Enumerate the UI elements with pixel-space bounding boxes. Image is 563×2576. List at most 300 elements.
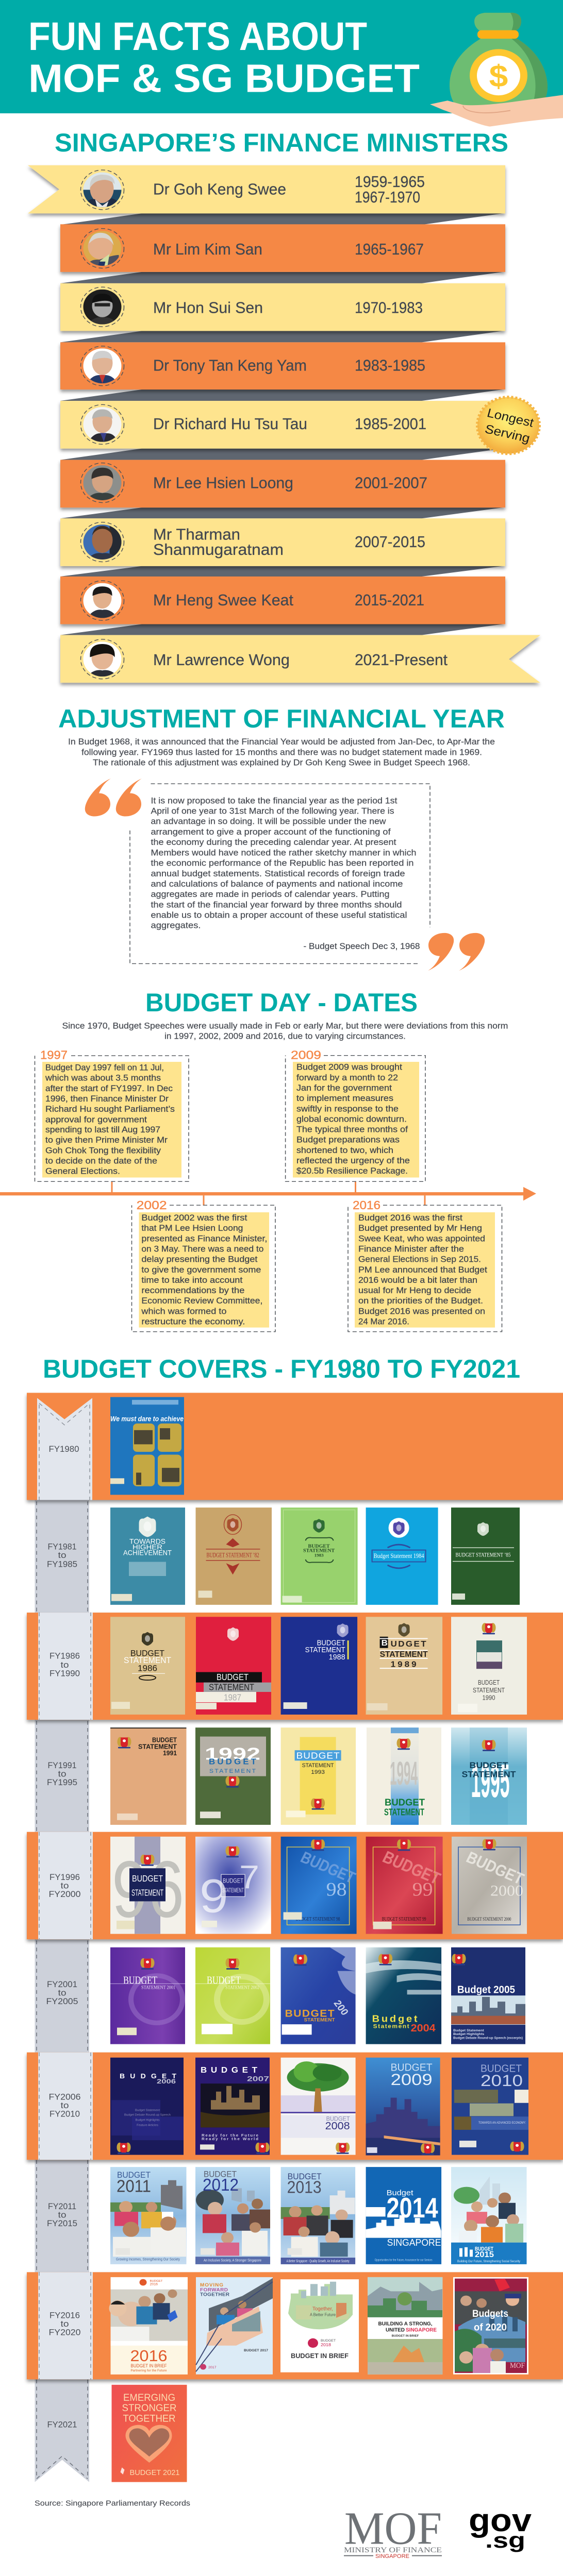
label: FY2016 to FY2020: FY2016	[49, 2310, 80, 2320]
timeline card: 2009	[286, 1048, 425, 1181]
cover: FY1987: BUDGET	[217, 1672, 249, 1682]
label: FY2016 to FY2020: to	[60, 2319, 69, 2329]
timeline card: 2016: Swee Keat, who was appointed	[358, 1233, 485, 1243]
timeline card: 2016: 2016	[353, 1199, 380, 1212]
cover: FY1996: BUDGET	[132, 1874, 163, 1884]
badge: longest serving: Serving	[483, 422, 532, 446]
timeline card: 2016: Budget 2016 was presented on	[358, 1306, 485, 1316]
cover: FY1997: 7	[239, 1859, 259, 1896]
label: FY2001 to FY2005	[46, 1979, 78, 2006]
quote text: April of one year to 31st March of the following year. There is	[151, 806, 394, 816]
cover: FY1992: 1992	[205, 1745, 260, 1764]
timeline card: 2009: 2009	[291, 1048, 321, 1062]
label: FY1991 to FY1995: FY1991	[47, 1760, 77, 1770]
cover: FY2007: BUDGET	[201, 2066, 257, 2075]
cover: FY2011: 2011	[117, 2177, 151, 2196]
label: FY2006 to FY2010: FY2006	[48, 2092, 80, 2102]
cover: FY2016: Partnering for the Future	[131, 2369, 167, 2372]
cover: FY2003	[281, 1947, 356, 2044]
timeline card: 2009: shortened to two, which	[296, 1145, 393, 1155]
minister: Mr Heng Swee Keat: 2015-2021	[355, 591, 424, 609]
minister: Mr Lawrence Wong: Mr Lawrence Wong	[153, 651, 290, 669]
cover: FY2004: Statement	[373, 2024, 409, 2029]
ribbon folds	[60, 213, 503, 635]
badge: longest serving: Longest	[486, 406, 535, 430]
cover: FY2002: BUDGET	[207, 1974, 241, 1986]
cover: FY2017: 2017	[208, 2366, 217, 2369]
icon: closing quote mark	[428, 933, 485, 971]
timeline card: 2002	[132, 1199, 275, 1332]
cover: FY2010: 2010	[481, 2071, 523, 2089]
cover: FY1991	[110, 1727, 187, 1825]
label: FY1981 to FY1985: to	[58, 1550, 66, 1560]
timeline card: 2009: swiftly in response to the	[296, 1104, 399, 1113]
cover: FY1990: STATEMENT	[473, 1686, 505, 1694]
cover: FY2012: An Inclusive Society, A Stronger Singapore	[204, 2258, 261, 2262]
logo: MOF: SINGAPORE	[375, 2554, 409, 2560]
cover: FY1991: STATEMENT	[138, 1743, 177, 1750]
cover: FY2000: 2000	[490, 1883, 523, 1899]
cover: FY2004: 2004	[411, 2023, 436, 2034]
cover: FY2012	[195, 2167, 270, 2264]
covers ribbon: grey bookmark	[35, 1497, 89, 2482]
label: FY2001 to FY2005: to	[58, 1988, 66, 1998]
cover: FY2017: BUDGET 2017	[244, 2349, 268, 2352]
cover: FY2016: 2016	[130, 2347, 167, 2365]
cover: FY2001: BUDGET	[123, 1974, 157, 1986]
cover: FY2015	[451, 2167, 527, 2264]
arrow: timeline axis	[0, 1187, 536, 1200]
cover: FY2007	[195, 2058, 270, 2155]
cover: FY2015: 2015	[475, 2250, 494, 2259]
cover: FY2014: Opportunities for the Future, Assurance for our Seniors	[375, 2259, 433, 2262]
cover: FY2007: Ready for the World	[202, 2137, 258, 2141]
cover: FY2016: 2016	[150, 2283, 158, 2286]
logo: MOF: MOF	[344, 2503, 442, 2554]
label: FY2006 to FY2010: to	[60, 2100, 69, 2110]
logo: gov.sg: .sg	[485, 2529, 525, 2553]
label: FY2011 to FY2015	[47, 2201, 77, 2228]
cover: FY1986: STATEMENT	[124, 1655, 171, 1665]
minister: Mr Lawrence Wong	[60, 635, 540, 683]
cover: FY1996: STATEMENT	[131, 1888, 163, 1897]
cover: FY1999: BUDGET	[379, 1848, 443, 1888]
cover: FY2018	[280, 2279, 359, 2372]
label: FY1996 to FY2000	[48, 1872, 80, 1899]
cover: FY1998: 98	[326, 1879, 347, 1900]
cover: FY1987: STATEMENT	[209, 1682, 254, 1692]
cover: FY2017: MOVING	[200, 2283, 223, 2288]
cover: FY2019: UNITED	[386, 2327, 405, 2333]
timeline	[0, 1048, 536, 1332]
cover: FY1994: BUDGET	[385, 1798, 425, 1808]
cover: FY2009	[366, 2058, 440, 2155]
cover: FY2006: Budget Debate Round-up Speech	[124, 2114, 171, 2116]
cover: FY2006	[110, 2058, 184, 2155]
timeline card: 1997	[35, 1048, 189, 1181]
cover: FY2003: STATEMENT	[304, 2018, 335, 2023]
label: FY1991 to FY1995: to	[58, 1769, 66, 1778]
cover: FY1993: 1993	[311, 1769, 325, 1775]
cover: FY2015: Building Our Future, Strengthening Social Security	[457, 2260, 521, 2263]
label: FY2011 to FY2015: FY2015	[47, 2218, 77, 2228]
quote text: the start of the financial year forward by three months should	[151, 900, 402, 909]
cover: FY2013: BUDGET	[288, 2172, 322, 2181]
cover: FY1988: BUDGET	[317, 1639, 345, 1647]
heading: Singapore's Finance Ministers: SINGAPORE’S FINANCE MINISTERS	[55, 128, 508, 158]
timeline card: 2016: Budget presented by Mr Heng	[358, 1223, 482, 1233]
cover: FY1990: BUDGET	[478, 1679, 500, 1686]
cover: FY1981: TOWARDS	[129, 1538, 165, 1546]
timeline card: 2016: Budget 2016 was the first	[358, 1213, 462, 1223]
label: FY1986 to FY1990: FY1990	[49, 1668, 80, 1678]
quote text: aggregates.	[151, 920, 201, 930]
quote text: the economic performance of the Republic has been reported in	[151, 858, 413, 868]
timeline card: 2002: which was formed to	[141, 1306, 226, 1316]
label: FY2011 to FY2015: to	[58, 2210, 66, 2219]
cover: FY1988	[281, 1617, 357, 1715]
cover: FY2002	[195, 1947, 270, 2044]
minister: Mr Tharman Shanmugaratnam: 2007-2015	[355, 533, 425, 551]
cover: FY1993: STATEMENT	[302, 1763, 334, 1769]
minister: Dr Goh Keng Swee: 1959-1965	[355, 173, 425, 191]
minister: Dr Richard Hu Tsu Tau: Dr Richard Hu Tsu Tau	[153, 415, 307, 433]
quote text: an advantage in so doing. It will be possible under the new	[151, 816, 386, 826]
timeline card: 1997: after the start of FY1997. In Dec	[45, 1083, 173, 1093]
cover: FY2018: BUDGET IN BRIEF	[291, 2352, 349, 2360]
cover: FY1985: BUDGET STATEMENT ’85	[455, 1551, 510, 1558]
timeline card: 2002: recommendations by the	[141, 1285, 244, 1295]
label: FY1986 to FY1990: FY1986	[49, 1651, 80, 1660]
cover: FY2018: BUDGET	[321, 2339, 336, 2343]
cover: FY1986	[110, 1617, 185, 1715]
intro text: financial year: In Budget 1968, it was announced that the Financial Year would be adjusted from Jan-Dec, to Apr-Mar the	[68, 737, 495, 747]
cover: FY2017: FORWARD	[200, 2287, 228, 2293]
cover: FY2019	[368, 2277, 442, 2375]
cover: FY1994	[367, 1727, 441, 1825]
label: FY1991 to FY1995	[47, 1760, 77, 1787]
minister: Mr Lim Kim San: Mr Lim Kim San	[153, 240, 262, 258]
intro text: budget day: in 1997, 2002, 2009 and 2016, due to varying circumstances.	[164, 1031, 406, 1041]
timeline card: 2016: General Elections in Sep 2015.	[358, 1254, 481, 1264]
cover: FY1986: 1986	[138, 1663, 157, 1673]
cover: FY2020: Budgets	[472, 2309, 508, 2319]
timeline card: 2002: time to take into account	[141, 1275, 243, 1285]
cover: FY2018: 2018	[321, 2343, 331, 2347]
icon: money bag on hand: $	[489, 59, 508, 94]
intro text: financial year: following year. FY1969 thus lasted for 15 months and there was no budget statement made in 1969.	[81, 747, 482, 757]
timeline card: 1997: to decide on the date of the	[45, 1156, 157, 1165]
cover: FY1983	[281, 1507, 358, 1605]
cover: FY2009: BUDGET	[391, 2062, 433, 2073]
cover: FY2019: BUILDING A STRONG,	[378, 2321, 433, 2327]
minister: Dr Tony Tan Keng Yam: 1983-1985	[355, 357, 425, 374]
intro text: budget day: Since 1970, Budget Speeches were usually made in Feb or early Mar, but there were deviations from this norm	[62, 1021, 508, 1030]
timeline card: 2016: PM Lee announced that Budget	[358, 1264, 487, 1275]
cover: FY1989: 1989	[391, 1660, 417, 1669]
cover: FY1997: STATEMENT	[222, 1887, 244, 1894]
intro text: budget day	[62, 1021, 508, 1041]
cover: FY2020: of 2020	[474, 2322, 507, 2333]
cover: FY2007: 2007	[247, 2075, 269, 2083]
cover: FY2014	[366, 2167, 441, 2264]
minister: Dr Goh Keng Swee	[28, 165, 505, 213]
timeline card: 2002: delay presenting the Budget	[141, 1254, 258, 1264]
cover: FY2012: BUDGET	[204, 2169, 237, 2179]
cover: FY1999: BUDGET STATEMENT 99	[382, 1917, 426, 1922]
cover: FY1999	[366, 1837, 443, 1934]
minister: Mr Hon Sui Sen	[60, 283, 505, 331]
cover: FY2005: Budget Highlights	[453, 2032, 484, 2036]
cover: FY2003: 200	[331, 1998, 350, 2018]
timeline card: 2009: to implement measures	[296, 1093, 393, 1103]
cover: FY2006: Budget Statement	[135, 2109, 160, 2112]
minister: Dr Tony Tan Keng Yam: Dr Tony Tan Keng Yam	[153, 357, 307, 374]
cover: FY2010: TOWARDS AN ADVANCED ECONOMY:	[478, 2121, 526, 2125]
cover: FY1990	[451, 1617, 527, 1715]
quote text: and calculations of balance of payments and national income	[151, 879, 403, 889]
cover: FY1997: BUDGET	[223, 1877, 243, 1885]
cover: FY2011	[110, 2167, 187, 2264]
cover: FY1989	[366, 1617, 442, 1715]
timeline card: 2009: Jan for the government	[296, 1083, 392, 1093]
cover: FY1994: STATEMENT	[384, 1807, 424, 1818]
quote text: It is now proposed to take the financial year as the period 1st	[151, 795, 398, 805]
header banner	[0, 0, 563, 127]
cover: FY1985	[451, 1507, 520, 1605]
cover: FY1995: BUDGET	[469, 1760, 508, 1770]
timeline card: 2016: 24 Mar 2016.	[358, 1316, 409, 1326]
icon: money bag on hand	[430, 13, 563, 127]
cover: FY2006: BUDGET	[120, 2073, 177, 2080]
timeline card: 1997: 1997	[40, 1048, 68, 1062]
source note: Source: Singapore Parliamentary Records	[35, 2499, 190, 2507]
timeline card: 2009: global economic downturn.	[296, 1114, 407, 1124]
cover: FY2017: TOGETHER	[200, 2292, 229, 2297]
quote text: the economy during the preceding calendar year. At present	[151, 837, 396, 847]
cover: FY2019: SINGAPORE	[406, 2327, 437, 2333]
cover: FY1987: 1987	[224, 1692, 241, 1702]
label: FY2016 to FY2020: FY2020	[48, 2327, 80, 2337]
minister: Dr Tony Tan Keng Yam	[60, 342, 505, 389]
cover: FY2016	[109, 2277, 188, 2375]
cover: FY2007: Ready for the Future	[202, 2133, 258, 2138]
timeline card: 2009: Budget 2009 was brought	[296, 1062, 402, 1072]
heading: Budget Covers: BUDGET COVERS - FY1980 TO FY2021	[43, 1354, 520, 1384]
cover: FY1995	[451, 1727, 527, 1825]
intro text: financial year	[68, 737, 495, 767]
cover: FY1982	[196, 1507, 272, 1605]
cover: FY2016: BUDGET IN BRIEF	[131, 2363, 167, 2369]
label: FY2006 to FY2010: FY2010	[49, 2109, 80, 2119]
cover: FY2008: 2008	[325, 2121, 350, 2132]
quote box	[85, 778, 485, 971]
label: FY2016 to FY2020	[48, 2310, 80, 2337]
cover: FY1980	[110, 1397, 184, 1495]
cover: FY2005: Budget Statement	[453, 2029, 485, 2032]
ministers ribbon	[28, 165, 540, 683]
cover: FY2009: 2009	[391, 2070, 433, 2089]
label: FY1996 to FY2000: FY2000	[48, 1889, 80, 1899]
intro text: financial year: The rationale of this adjustment was explained by Dr Goh Keng Swee in Budget Speech 1968.	[93, 757, 470, 767]
cover: FY1983: 1983	[314, 1553, 324, 1557]
cover: FY2001: STATEMENT 2001	[141, 1985, 175, 1990]
minister: Mr Lawrence Wong: 2021-Present	[355, 651, 448, 669]
timeline card: 2016: usual for Mr Heng to decide	[358, 1285, 471, 1295]
timeline card: 1997: Goh Chok Tong the flexibility	[45, 1145, 161, 1155]
cover: FY2002: STATEMENT 2002	[225, 1985, 259, 1990]
cover: FY1987	[196, 1617, 271, 1715]
minister: Mr Heng Swee Keat	[60, 577, 505, 624]
cover: FY2000	[452, 1837, 527, 1934]
cover: FY2020: MOF	[510, 2361, 525, 2370]
timeline card: 1997: to give then Prime Minister Mr	[45, 1135, 168, 1145]
cover: FY2014: SINGAPORE	[387, 2238, 441, 2248]
timeline card: 1997: Richard Hu sought Parliament’s	[45, 1104, 175, 1114]
cover: FY2005	[451, 1947, 525, 2044]
minister: Mr Hon Sui Sen: 1970-1983	[355, 299, 423, 316]
cover: FY2004: Budget	[372, 2014, 418, 2024]
quote text: enable us to obtain a proper account of these useful statistical	[151, 910, 407, 920]
timeline card: 1997: General Elections.	[45, 1166, 120, 1176]
timeline card: 1997: Budget Day 1997 fell on 11 Jul,	[45, 1062, 164, 1072]
minister: Mr Tharman Shanmugaratnam: Mr Tharman	[153, 526, 240, 543]
timeline card: 1997: approval for government	[45, 1114, 147, 1124]
timeline card: 2002: presented as Finance Minister,	[141, 1233, 267, 1243]
cover: FY1984	[366, 1507, 438, 1605]
cover: FY2010	[452, 2058, 528, 2155]
cover: FY1998	[281, 1837, 358, 1934]
label: FY2006 to FY2010	[48, 2092, 80, 2119]
title	[28, 14, 420, 101]
cover: FY1997	[195, 1837, 271, 1934]
minister: Mr Hon Sui Sen: Mr Hon Sui Sen	[153, 299, 263, 316]
minister: Dr Goh Keng Swee: 1967-1970	[355, 188, 420, 206]
timeline card: 2002: Budget 2002 was the first	[141, 1213, 247, 1223]
cover: FY2012: 2012	[203, 2176, 239, 2195]
cover: FY1997: 9	[200, 1870, 228, 1923]
cover: FY2016: BUDGET	[150, 2280, 163, 2283]
cover: FY1986: BUDGET	[130, 1648, 164, 1658]
quote text: arrangement to give a proper account of the functioning of	[151, 827, 391, 837]
cover: FY2021: EMERGING	[123, 2393, 175, 2403]
timeline card: 2002: Economic Review Committee,	[141, 1296, 262, 1306]
timeline card: 2002: restructure the economy.	[141, 1316, 245, 1326]
timeline card: 2016	[348, 1199, 502, 1332]
cover: FY2003: BUDGET	[285, 2008, 335, 2019]
cover: FY2018: A Better Future	[310, 2312, 336, 2317]
label: FY2001 to FY2005: FY2001	[47, 1979, 77, 1989]
cover: FY1981: ACHIEVEMENT	[123, 1549, 172, 1557]
cover: FY2011: Growing Incomes, Strengthening Our Society	[116, 2257, 180, 2261]
cover: FY1991: 1991	[163, 1750, 177, 1757]
quote text: aggregates are made in periods of calendar years. Putting	[151, 889, 390, 899]
timeline card: 2002: on 3 May. There was a need to	[141, 1244, 263, 1253]
label: FY1986 to FY1990	[49, 1651, 80, 1678]
label: FY1981 to FY1985: FY1985	[47, 1559, 77, 1569]
timeline card: 2002: that PM Lee Hsien Loong	[141, 1223, 243, 1233]
label: FY1981 to FY1985	[47, 1541, 77, 1569]
cover: FY1998: BUDGET	[298, 1848, 358, 1887]
cover: FY1981	[110, 1507, 185, 1605]
timeline card: 2009: $20.5b Resilience Package.	[296, 1166, 408, 1176]
cover: FY1995: 1995	[471, 1754, 509, 1807]
logo: gov.sg: gov	[469, 2502, 532, 2538]
cover: FY1995: STATEMENT	[462, 1769, 516, 1779]
cover: FY2000: BUDGET	[463, 1848, 527, 1888]
cover: FY2013	[281, 2167, 355, 2264]
cover: FY2018: Together,	[312, 2306, 333, 2312]
cover: FY2011: BUDGET	[117, 2170, 151, 2180]
cover: FY2021: STRONGER	[122, 2403, 176, 2414]
heading: Budget Day - Dates: BUDGET DAY - DATES	[145, 988, 418, 1017]
cover: FY1983: BUDGET	[308, 1544, 330, 1549]
quote text: annual budget statements. Statistical records of foreign trade	[151, 869, 405, 878]
cover: FY1988: STATEMENT	[305, 1646, 345, 1654]
cover: FY1989: UDGET	[391, 1640, 426, 1649]
cover: FY2019: BUDGET IN BRIEF	[392, 2335, 419, 2337]
label: FY1996 to FY2000: FY1996	[49, 1872, 80, 1882]
badge: longest serving	[477, 397, 539, 454]
quote text: - Budget Speech Dec 3, 1968	[303, 941, 420, 951]
timeline card: 2002: 2002	[137, 1199, 167, 1212]
cover: FY1982: BUDGET STATEMENT ’82	[207, 1551, 259, 1558]
minister: Mr Tharman Shanmugaratnam	[60, 518, 505, 566]
cover: FY1992	[195, 1727, 271, 1825]
label: FY2021: FY2021	[47, 2419, 77, 2429]
cover: FY2010: BUDGET	[481, 2063, 522, 2074]
cover: FY1988: 1988	[329, 1653, 345, 1662]
cover: FY1998: BUDGET STATEMENT 98	[296, 1917, 340, 1922]
cover: FY2001	[110, 1947, 185, 2044]
timeline card: 2009: The typical three months of	[296, 1124, 408, 1134]
minister: Mr Lee Hsien Loong	[60, 460, 505, 507]
cover: FY1992: STATEMENT	[209, 1769, 256, 1774]
quote text	[151, 795, 420, 951]
cover: FY2021	[111, 2385, 187, 2482]
cover: FY2021: BUDGET 2021	[130, 2468, 179, 2477]
timeline card: 2009: Budget preparations was	[296, 1134, 400, 1145]
cover: FY1991: BUDGET	[152, 1736, 177, 1743]
cover: FY1999: 99	[412, 1879, 433, 1900]
cover: FY2005: Budget 2005	[457, 1984, 515, 1995]
cover: FY2008	[281, 2058, 356, 2155]
cover: FY2017	[196, 2277, 273, 2375]
cover: FY1981: HIGHER	[133, 1544, 162, 1552]
icon: opening quote mark	[85, 778, 142, 816]
minister: Mr Heng Swee Keat: Mr Heng Swee Keat	[153, 591, 293, 609]
cover: FY2008: BUDGET	[326, 2115, 350, 2122]
cover: FY2004	[366, 1947, 441, 2044]
timeline card: 2002: to give the government some	[141, 1264, 261, 1275]
label: FY1991 to FY1995: FY1995	[47, 1777, 77, 1787]
cover: FY2005: Budget Debate Round-up Speech (excerpts)	[453, 2037, 523, 2040]
timeline card: 1997: 1996, then Finance Minister Dr	[45, 1094, 169, 1104]
cover: FY2020	[453, 2277, 528, 2375]
minister: Mr Lee Hsien Loong: 2001-2007	[355, 474, 427, 492]
cover: FY2000: BUDGET STATEMENT 2000	[467, 1917, 511, 1922]
timeline card: 2016: Finance Minister after the	[358, 1244, 464, 1253]
timeline card: 1997: which was about 3.5 months	[45, 1073, 161, 1083]
cover: FY1992: BUDGET	[209, 1757, 256, 1766]
cover: FY2014: Budget	[387, 2189, 413, 2197]
label: FY1980: FY1980	[48, 1444, 79, 1454]
cover: FY1993: BUDGET	[296, 1751, 340, 1760]
cover: FY2006: Feature Articles	[137, 2124, 158, 2127]
minister: Mr Lee Hsien Loong: Mr Lee Hsien Loong	[153, 474, 293, 492]
timeline card: 2016: 2016 would be a bit later than	[358, 1275, 477, 1285]
title: MOF & SG BUDGET	[28, 57, 420, 101]
